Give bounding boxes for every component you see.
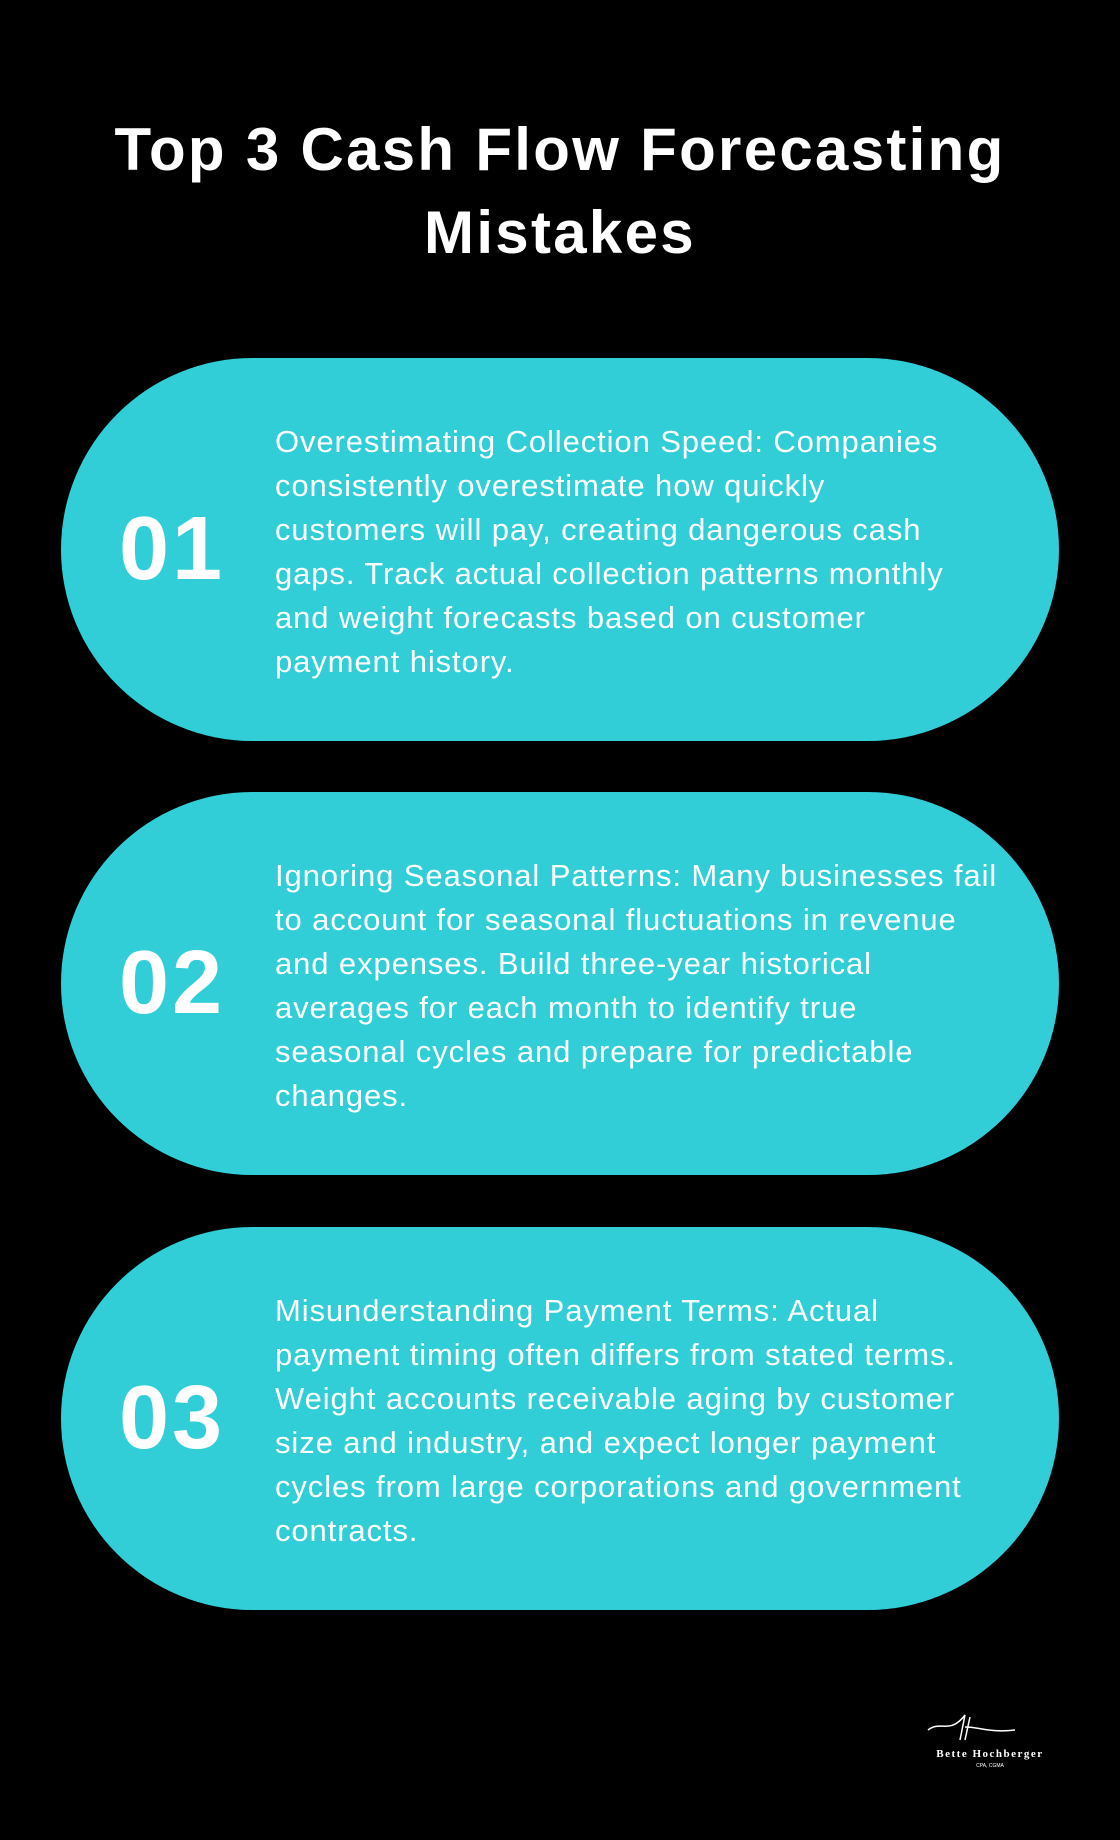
title: Top 3 Cash Flow Forecasting bbox=[114, 116, 1006, 183]
panel: mistake 03 bbox=[61, 1227, 1059, 1610]
text: payment terms: payment timing often differs from stated terms. bbox=[275, 1337, 956, 1372]
text: seasonal patterns: averages for each month to identify true bbox=[275, 990, 857, 1025]
text: overestimating collection speed: consistently overestimate how quickly bbox=[275, 468, 825, 503]
number 02: 02 bbox=[119, 933, 225, 1033]
text: overestimating collection speed: customers will pay, creating dangerous cash bbox=[275, 512, 921, 547]
panel: mistake 01 bbox=[61, 358, 1059, 741]
number 03: 03 bbox=[119, 1368, 225, 1468]
text: seasonal patterns: to account for seasonal fluctuations in revenue bbox=[275, 902, 957, 937]
text: payment terms: Weight accounts receivable aging by customer bbox=[275, 1381, 955, 1416]
text: payment terms: contracts. bbox=[275, 1513, 418, 1548]
text: overestimating collection speed: gaps. Track actual collection patterns monthly bbox=[275, 556, 944, 591]
panel: mistake 02 bbox=[61, 792, 1059, 1175]
text: overestimating collection speed: payment history. bbox=[275, 644, 515, 679]
text: payment terms bbox=[275, 1293, 962, 1548]
text: payment terms: Misunderstanding Payment Terms: Actual bbox=[275, 1293, 879, 1328]
text: payment terms: size and industry, and expect longer payment bbox=[275, 1425, 936, 1460]
logo bbox=[928, 1714, 1044, 1769]
text: payment terms: cycles from large corporations and government bbox=[275, 1469, 962, 1504]
title: Mistakes bbox=[424, 199, 696, 266]
text: seasonal patterns bbox=[275, 858, 997, 1113]
title bbox=[114, 116, 1006, 266]
number 01: 01 bbox=[119, 499, 225, 599]
text: overestimating collection speed: Overestimating Collection Speed: Companies bbox=[275, 424, 938, 459]
text: seasonal patterns: changes. bbox=[275, 1078, 408, 1113]
text: overestimating collection speed bbox=[275, 424, 944, 679]
text: seasonal patterns: seasonal cycles and prepare for predictable bbox=[275, 1034, 913, 1069]
logo: CPA, CGMA bbox=[976, 1763, 1005, 1769]
logo: Bette Hochberger bbox=[936, 1748, 1044, 1760]
text: seasonal patterns: and expenses. Build three-year historical bbox=[275, 946, 872, 981]
text: seasonal patterns: Ignoring Seasonal Patterns: Many businesses fail bbox=[275, 858, 997, 893]
text: overestimating collection speed: and weight forecasts based on customer bbox=[275, 600, 866, 635]
